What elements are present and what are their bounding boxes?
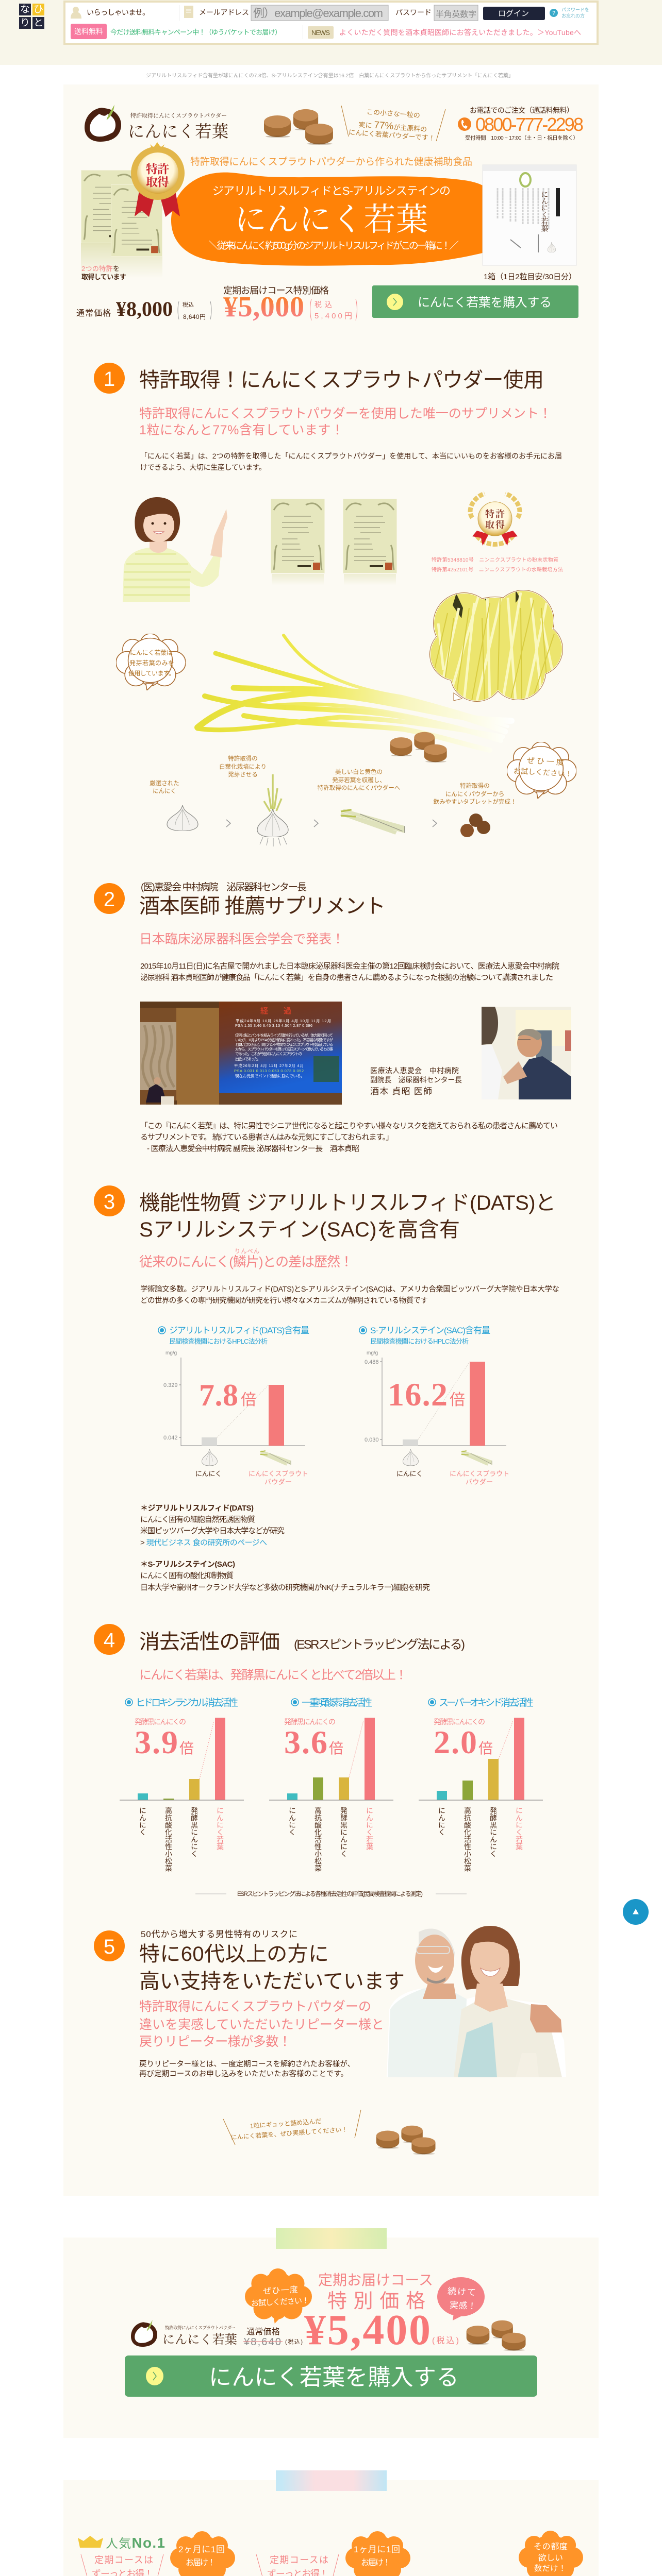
- subheading with ruby: りんぺん: [235, 1248, 259, 1255]
- regular price: (税込): [285, 2338, 303, 2345]
- column 1 bubble: [170, 2531, 235, 2576]
- special price: ¥5,000: [223, 291, 304, 323]
- section 4: [94, 1624, 543, 1897]
- forgot password link: お忘れの方: [561, 13, 585, 19]
- panel: campaign: [63, 2228, 599, 2438]
- chart: superoxide: 高抗酸化活性小松菜: [464, 1806, 472, 1872]
- doctor quote: - 医療法人恵愛会中村病院 副院長 泌尿器科センター長 酒本貞昭: [147, 1144, 359, 1153]
- campaign title: [318, 2272, 433, 2312]
- notes: にんにく固有の細胞自然死誘因物質: [140, 1515, 255, 1524]
- certificates: [81, 170, 162, 281]
- heading: 酒本医師 推薦サプリメント: [139, 895, 386, 918]
- chart: SAC: パウダー: [466, 1478, 493, 1486]
- doctor quote: [140, 1122, 558, 1153]
- photo: doctor: [482, 1007, 571, 1099]
- notes: [140, 1504, 430, 1592]
- photo: conference: 現在お元気でバンド活動に励んでいる。: [235, 1073, 305, 1078]
- special price: ¥5,400: [304, 2306, 431, 2354]
- chart: DATS: 7.8: [199, 1378, 238, 1412]
- heading: 消去活性の評価: [139, 1631, 280, 1653]
- photo: conference: と問い合わせると、同じバンド仲間でにんにくスプラウトを製造している: [235, 1042, 333, 1047]
- heading: 機能性物質 ジアリルトリスルフィド(DATS)と: [139, 1192, 556, 1214]
- orange blob: ＼従来にんにく約500g分のジアリルトリスルフィドがこの一箱に！／: [209, 240, 459, 251]
- photo: conference: 方から、スプラウトパウダーを貰って毎日スプーンで飲んでいるとの事: [235, 1046, 333, 1052]
- chart: superoxide: 発酵黒にんにくの: [434, 1718, 485, 1726]
- icon: mail: [179, 5, 193, 21]
- doctor caption: 副院長 泌尿器科センター長: [370, 1076, 462, 1084]
- chart: superoxide: [419, 1697, 543, 1872]
- icon: tablets: [467, 2320, 526, 2351]
- login and news box: [64, 2, 598, 44]
- number badge: [94, 1185, 125, 1216]
- orange blob: にんにく若葉: [235, 202, 428, 238]
- login button: ログイン: [498, 9, 529, 18]
- callout: orange bubble: [245, 2268, 312, 2324]
- forgot password link: パスワードを: [561, 7, 589, 12]
- chart: singlet oxygen: 発酵黒にんにくの: [284, 1718, 336, 1726]
- patent badge: 取得: [485, 520, 505, 530]
- panel: course comparison: [63, 2470, 599, 2576]
- body text: どの世界の多くの専門研究機関が研究を行い様々なメカニズムが解明されている物質です: [140, 1296, 428, 1305]
- photo: conference: 経 過: [260, 1007, 291, 1015]
- callout: young leaves only: 発芽若葉のみを: [129, 659, 174, 667]
- photo: senior couple: [387, 1926, 566, 2077]
- icon: tablets: [376, 2126, 436, 2155]
- certificates: 2つの特許を: [81, 265, 120, 273]
- notes: ＊ジアリルトリスルフィド(DATS): [140, 1504, 254, 1513]
- brand logo: にんにく若葉: [162, 2333, 237, 2347]
- header strip background: [0, 0, 662, 65]
- notes: 日本大学や豪州オークランド大学など多数の研究機関がNK(ナチュラルキラー)細胞を研究: [140, 1583, 430, 1592]
- slanted note: にんにく若葉を、ぜひ実感してください！: [230, 2125, 348, 2141]
- chart: SAC: S-アリルシステイン(SAC)含有量: [370, 1326, 490, 1335]
- heading: [139, 1192, 556, 1241]
- mail input: 例）example@example.com: [253, 7, 383, 20]
- chart: DATS: にんにく: [195, 1470, 222, 1478]
- section 2: [94, 882, 571, 1153]
- callout: please try: [507, 742, 576, 799]
- callout: young leaves only: にんにく若葉は: [130, 649, 173, 656]
- chart: superoxide: スーパーオキシド消去活性: [439, 1697, 534, 1708]
- body text: [140, 452, 562, 471]
- column 2 bubble: お届け！: [361, 2558, 391, 2567]
- chart: SAC: mg/g: [367, 1350, 378, 1356]
- photo: conference: 平成24年9月 10月 25年1月 4月 10月 11月 12月: [236, 1018, 331, 1023]
- doctor caption: 酒本 貞昭 医師: [370, 1087, 432, 1096]
- brand logo: にんにく若葉: [128, 122, 228, 141]
- number badge: 1: [104, 368, 115, 391]
- heading: (ESRスピントラッピング法による): [294, 1638, 465, 1652]
- password input: [434, 5, 478, 21]
- callout: please try: ぜひ一度: [527, 756, 564, 767]
- password input: 半角英数字: [436, 10, 476, 19]
- hero tagline: 特許取得にんにくスプラウトパウダーから作られた健康補助食品: [190, 156, 472, 167]
- icon: garlic: [167, 805, 198, 831]
- column 3 bubble: 欲しい: [538, 2553, 563, 2563]
- icon: user: [71, 7, 81, 19]
- column 2 pitch: [256, 2554, 339, 2576]
- arrow: [314, 820, 318, 827]
- slanted tablet note: [341, 106, 445, 142]
- heading: 特許取得！にんにくスプラウトパウダー使用: [139, 369, 544, 392]
- patent badge: 特許: [485, 509, 505, 519]
- orange blob: [171, 173, 485, 266]
- phone order: 受付時間 10:00 ~ 17:00（土・日・祝日を除く）: [465, 134, 578, 141]
- campaign title: 特別価格: [327, 2291, 425, 2312]
- callout: young leaves only: [116, 634, 186, 690]
- icon: tablets: [390, 732, 447, 762]
- chart: SAC: 民間検査機関におけるHPLC法分析: [370, 1337, 469, 1345]
- chart: DATS: ジアリルトリスルフィド(DATS)含有量: [169, 1326, 309, 1335]
- tape: [276, 2470, 387, 2491]
- chart: singlet oxygen: [269, 1697, 393, 1872]
- section 1: [94, 363, 576, 846]
- panel: main: [63, 84, 599, 2196]
- body text: 戻りリピーター様とは、一度定期コースを解約されたお客様が、: [139, 2060, 355, 2069]
- step 3 label: [318, 768, 400, 791]
- chart: DATS: mg/g: [166, 1350, 177, 1356]
- forgot password link: ?: [552, 10, 555, 16]
- number badge: 5: [104, 1936, 115, 1958]
- number badge: [94, 883, 125, 914]
- subheading: 戻りリピーター様が多数！: [139, 2035, 291, 2049]
- chart: hydroxyl: 高抗酸化活性小松菜: [164, 1806, 173, 1872]
- notes: > 現代ビジネス 食の研究所のページへ: [140, 1538, 267, 1547]
- callout: red bubble: [437, 2277, 485, 2320]
- chart: hydroxyl: [120, 1697, 244, 1872]
- callout: please try: お試しください！: [514, 767, 572, 778]
- chart: hydroxyl: 発酵黒にんにくの: [135, 1718, 186, 1726]
- popular badge: [78, 2535, 165, 2551]
- heading: [139, 1631, 465, 1653]
- patent medal: [131, 142, 185, 217]
- chart: hydroxyl: ヒドロキシラジカル消去活性: [136, 1697, 238, 1708]
- heading: 特に60代以上の方に: [139, 1943, 329, 1965]
- buy button: にんにく若葉を購入する: [209, 2365, 459, 2390]
- step 3 label: 特許取得のにんにくパウダーへ: [318, 784, 400, 791]
- section 5: [94, 1926, 566, 2155]
- step 2 label: 白葉化栽培により: [219, 763, 267, 770]
- chart: DATS: にんにくスプラウト: [249, 1470, 308, 1478]
- step 4 label: 飲みやすいタブレットが完成！: [433, 798, 517, 805]
- slanted tablet note: にんにく若葉パウダーです！: [349, 128, 435, 142]
- doctor affiliation: (医)恵愛会 中村病院 泌尿器科センター長: [141, 882, 307, 893]
- chart: superoxide: 発酵黒にんにく: [489, 1807, 498, 1857]
- patent medal: 取得: [146, 176, 169, 189]
- free shipping tag: 送料無料: [74, 27, 103, 36]
- site logo: ひ: [34, 4, 43, 15]
- body text: 再び定期コースのお申し込みをいただいたお客様のことです。: [139, 2070, 348, 2078]
- photo: conference: であった。これが今回のにんにくスプラウトの: [235, 1051, 302, 1056]
- callout: orange bubble: お試しください！: [251, 2296, 309, 2308]
- news tag: NEWS: [311, 29, 330, 37]
- icon: harvested sprouts: [341, 810, 405, 833]
- slanted tablet note: 実に 77%が主原料の: [358, 118, 427, 134]
- subheading: 特許取得にんにくスプラウトパウダーの: [139, 1999, 371, 2014]
- box caption: 1箱（1日2粒目安/30日分）: [484, 273, 576, 281]
- product box: にんにく若葉: [540, 191, 549, 232]
- regular price: [76, 297, 211, 320]
- photo: conference: PSA 0.031 0.013 0.053 0.073 0.052: [234, 1069, 304, 1073]
- lead text: 50代から増大する男性特有のリスクに: [141, 1929, 297, 1939]
- buy button: にんにく若葉を購入する: [418, 296, 552, 310]
- regular price: 8,640円: [183, 313, 206, 320]
- slanted note: 1粒にギュッと詰め込んだ: [250, 2117, 322, 2130]
- doctor quote: るサプリメントです。 続けている患者さんはみな元気にすごしておられます。」: [140, 1133, 393, 1142]
- body text: けできるよう、大切に生産しています。: [140, 463, 266, 471]
- number badge: [94, 363, 125, 394]
- slanted note: [223, 2110, 361, 2145]
- patent medal: 特許: [146, 163, 169, 176]
- section 3: [94, 1185, 559, 1592]
- photo: conference: PSA 1.55 3.46 6.45 3.13 4.504 2.87 0.396: [235, 1023, 312, 1028]
- buy button: [125, 2355, 537, 2397]
- regular price: ¥8,640: [243, 2336, 281, 2348]
- chart: superoxide: にんにく: [438, 1807, 446, 1836]
- patent numbers: [432, 556, 563, 573]
- column 2 bubble: [345, 2531, 410, 2576]
- special price: [223, 285, 357, 323]
- photo: conference: [140, 1002, 342, 1105]
- chart: superoxide: 2.0: [434, 1724, 477, 1760]
- regular price: 税込: [183, 301, 194, 308]
- callout: young leaves only: 使用しています。: [128, 669, 175, 677]
- phone order: [458, 106, 584, 141]
- number badge: 4: [104, 1629, 115, 1652]
- sprout stems: [197, 635, 511, 750]
- brand logo: [131, 2320, 237, 2347]
- popular badge: 人気No.1: [106, 2535, 165, 2551]
- orange blob: ジアリルトリスルフィドとS-アリルシステインの: [212, 184, 451, 197]
- step 2 label: 特許取得の: [228, 755, 258, 762]
- body text: 2015年10月11日(日)に名古屋で開かれました日本臨床泌尿器科医会主催の第12回臨床検討会において、医療法人恵愛会中村病院: [140, 962, 559, 971]
- scroll to top button: [623, 1899, 649, 1925]
- step 4 label: 特許取得の: [460, 782, 490, 789]
- number badge: 3: [104, 1191, 115, 1213]
- chart: singlet oxygen: 高抗酸化活性小松菜: [314, 1806, 322, 1872]
- number badge: 2: [104, 888, 115, 911]
- chart: DATS: 0.329: [163, 1382, 178, 1388]
- chart: hydroxyl: 倍: [179, 1740, 194, 1756]
- site logo: な: [20, 4, 30, 15]
- step 1 label: にんにく: [153, 788, 176, 794]
- chart: singlet oxygen: 発酵黒にんにく: [340, 1807, 348, 1857]
- chart footnote: ESRスピントラッピング法による各種消去活性の評価(民間検査機関による測定): [237, 1890, 423, 1897]
- chart: singlet oxygen: にんにく若葉: [366, 1807, 374, 1850]
- body text: [140, 962, 559, 982]
- chart: superoxide: 倍: [478, 1740, 493, 1756]
- page caption: ジアリルトリスルフィド含有量が球にんにくの7.8倍、S-アリルシステイン含有量は16.2倍 白葉にんにくスプラウトから作ったサプリメント「にんにく若葉」: [146, 72, 514, 79]
- body text: 「にんにく若葉」は、2つの特許を取得した「にんにくスプラウトパウダー」を使用して、本当にいいものをお客様のお手元にお届: [140, 452, 562, 460]
- callout: red bubble: 実感！: [450, 2300, 476, 2311]
- site logo: と: [34, 18, 43, 28]
- patent badge: [470, 494, 520, 546]
- arrow: [433, 820, 437, 827]
- body text: 泌尿器科 酒本貞昭医師が健康食品「にんにく若葉」を自身の患者さんに薦めるようになった根拠の治験について講演されました: [140, 973, 553, 982]
- phone order: 0800-777-2298: [475, 114, 584, 135]
- chart: hydroxyl: 発酵黒にんにく: [190, 1807, 198, 1857]
- column 2 pitch: 定期コースは: [270, 2555, 328, 2565]
- chart: hydroxyl: 3.9: [135, 1724, 178, 1760]
- regular price: 通常価格: [76, 309, 111, 318]
- arrow: [226, 820, 230, 827]
- chart: hydroxyl: にんにく: [139, 1807, 147, 1836]
- step 1 label: [150, 779, 179, 794]
- chart: superoxide: にんにく若葉: [515, 1807, 523, 1850]
- certificate 1: [271, 499, 325, 585]
- step 3 label: 美しい白と黄色の: [335, 768, 383, 775]
- column 1 bubble: 2ヶ月に1回: [178, 2545, 225, 2554]
- chart: DATS: 倍: [241, 1392, 256, 1409]
- photo: conference: いたが、11月よりPSAが減少傾向に変わった。不思議な現象ですが: [235, 1037, 333, 1042]
- chart: singlet oxygen: 倍: [329, 1740, 343, 1756]
- forgot password link: [550, 7, 589, 19]
- column 3 bubble: [519, 2531, 583, 2576]
- photo: conference: 平成26年2月 4月 11月 27年2月 4月: [234, 1063, 304, 1068]
- heading: 高い支持をいただいています: [139, 1970, 405, 1993]
- regular price: 通常価格: [246, 2327, 280, 2336]
- photo: conference: 症例は私とバンドを組みライブ活動を行っているが、体力面で困って: [235, 1032, 333, 1038]
- greeting: いらっしゃいませ。: [87, 8, 150, 16]
- body text: [139, 2060, 355, 2078]
- doctor caption: 医療法人恵愛会 中村病院: [370, 1066, 459, 1075]
- subheading: 特許取得にんにくスプラウトパウダーを使用した唯一のサプリメント！: [139, 406, 552, 421]
- news text: よくいただく質問を酒本貞昭医師にお答えいただきました。＞YouTubeへ: [339, 28, 581, 37]
- icon: brown tablets: [460, 814, 490, 837]
- column 2 bubble: 1ヶ月に1回: [354, 2545, 400, 2554]
- brand logo: [85, 105, 228, 142]
- buy button: [372, 285, 578, 318]
- step 3 label: 発芽若葉を収穫し、: [332, 776, 386, 784]
- chart: DATS: 0.042: [163, 1435, 178, 1441]
- chart: SAC: にんにくスプラウト: [450, 1470, 509, 1478]
- campaign title: 定期お届けコース: [318, 2272, 433, 2288]
- step 2 label: [219, 755, 267, 778]
- hero: [76, 105, 584, 323]
- chart: SAC: [359, 1326, 509, 1486]
- heading: [139, 1943, 405, 1993]
- chart: DATS: 民間検査機関におけるHPLC法分析: [169, 1337, 268, 1345]
- number badge: [94, 1930, 125, 1961]
- chart: SAC: 0.486: [365, 1359, 379, 1365]
- column 3 bubble: 数だけ！: [534, 2564, 566, 2573]
- callout: red bubble: 続けて: [448, 2286, 476, 2297]
- patent numbers: 特許第5348810号 ニンニクスプラウトの粉末状物質: [432, 556, 558, 563]
- step 4 label: にんにくパウダーから: [445, 790, 504, 798]
- site logo: [19, 4, 44, 29]
- callout: orange bubble: ぜひ一度: [263, 2285, 298, 2296]
- heading: Sアリルシステイン(SAC)を高含有: [139, 1218, 460, 1241]
- column 1 pitch: [81, 2554, 163, 2576]
- subheading with ruby: 従来のにんにく(鱗片)との差は歴然！: [139, 1254, 353, 1269]
- doctor caption: [370, 1066, 462, 1096]
- patent numbers: 特許第4252101号 ニンニクスプラウトの水耕栽培方法: [432, 566, 563, 573]
- photo: conference: 出会いであった。: [235, 1056, 261, 1061]
- regular price: ¥8,000: [116, 297, 173, 320]
- tape: [276, 2228, 387, 2249]
- phone order: お電話でのご注文（通話料無料）: [470, 106, 574, 114]
- chart: SAC: にんにく: [396, 1470, 423, 1478]
- subheading: 違いを実感していただいたリピーター様と: [139, 2018, 384, 2032]
- chart: DATS: [158, 1326, 309, 1486]
- special price: 税込: [315, 300, 332, 309]
- chart: SAC: 0.030: [365, 1437, 379, 1443]
- brand logo: 特許取得にんにくスプラウトパウダー: [165, 2325, 236, 2330]
- brand logo: 特許取得にんにくスプラウトパウダー: [130, 112, 227, 119]
- column 3 bubble: その都度: [534, 2542, 568, 2551]
- password label: パスワード: [395, 8, 432, 16]
- number badge: [94, 1624, 125, 1655]
- site logo: り: [20, 18, 30, 28]
- special price: (税込): [432, 2336, 459, 2345]
- icon: sprouting garlic: [257, 774, 288, 846]
- login button: [483, 7, 545, 20]
- doctor quote: 「この『にんにく若葉』は、特に男性でシニア世代になると起こりやすい様々なリスクを抱えておられる私の患者さんに薦めてい: [140, 1122, 558, 1130]
- subheading: 日本臨床泌尿器科医会学会で発表！: [139, 932, 344, 946]
- photo: woman: [123, 497, 227, 602]
- icon: tablets: [264, 109, 333, 145]
- step 1 label: 厳選された: [150, 779, 179, 787]
- campaign text: 今だけ送料無料キャンペーン中！（ゆうパケットでお届け）: [110, 28, 282, 36]
- notes: にんにく固有の酸化抑制物質: [140, 1571, 234, 1580]
- notes: ＊S-アリルシステイン(SAC): [140, 1560, 235, 1569]
- column 1 bubble: お届け！: [186, 2558, 216, 2567]
- photo: sprouts in cloud: [428, 587, 563, 703]
- chart: singlet oxygen: にんにく: [288, 1807, 296, 1836]
- free shipping tag: [71, 24, 107, 39]
- step 2 label: 発芽させる: [228, 771, 258, 778]
- chart: hydroxyl: にんにく若葉: [216, 1807, 224, 1850]
- certificate 2: [343, 499, 397, 585]
- regular price: [243, 2327, 303, 2348]
- subheading: にんにく若葉は、発酵黒にんにくと比べて2倍以上！: [139, 1668, 407, 1682]
- slanted tablet note: この小さな一粒の: [367, 108, 420, 120]
- subheading: 1粒になんと77%含有しています！: [139, 423, 344, 437]
- product box: [483, 165, 576, 265]
- step 4 label: [433, 782, 517, 805]
- chart: singlet oxygen: 一重項酸素消去活性: [302, 1697, 372, 1708]
- certificates: 取得しています: [81, 273, 126, 281]
- body text: [140, 1284, 559, 1305]
- subheading: [139, 406, 552, 437]
- notes: 米国ピッツバーグ大学や日本大学などが研究: [140, 1527, 285, 1535]
- body text: 学術論文多数。ジアリルトリスルフィド(DATS)とS-アリルシステイン(SAC)は、アメリカ合衆国ピッツバーグ大学院や日本大学な: [140, 1284, 559, 1294]
- mail label: メールアドレス: [199, 8, 249, 16]
- special price: 定期お届けコース特別価格: [223, 285, 329, 296]
- chart: SAC: 倍: [450, 1392, 465, 1409]
- chart: DATS: パウダー: [264, 1478, 292, 1486]
- subheading: [139, 1999, 384, 2049]
- special price: 5,400円: [315, 312, 352, 320]
- column 1 pitch: 定期コースは: [94, 2555, 153, 2565]
- chart: singlet oxygen: 3.6: [284, 1724, 327, 1760]
- chart: SAC: 16.2: [388, 1376, 448, 1413]
- news tag: [303, 25, 334, 39]
